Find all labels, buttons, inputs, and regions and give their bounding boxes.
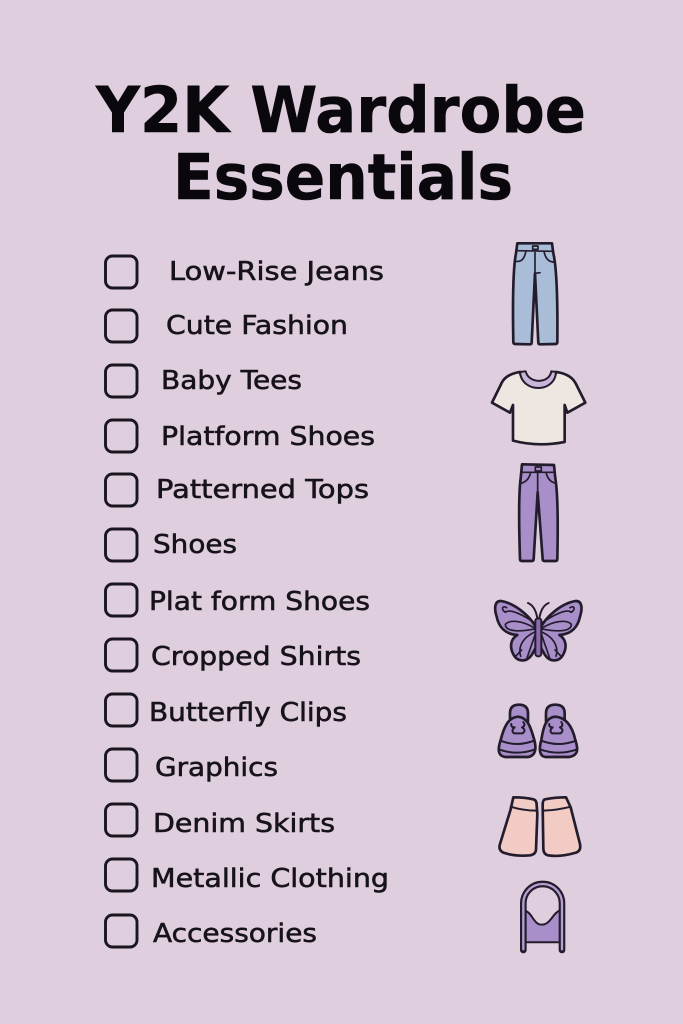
item: Metallic Clothing: Metallic Clothing (151, 864, 389, 894)
item: Plat form Shoes: Plat form Shoes (149, 587, 370, 617)
item: Cute Fashion (106, 310, 348, 342)
item: Patterned Tops (106, 474, 369, 506)
title: Y2K Wardrobe (95, 74, 586, 147)
item: Low-Rise Jeans (106, 256, 384, 288)
item: Low-Rise Jeans: Low-Rise Jeans (169, 257, 384, 287)
icon: platform shoes (499, 705, 577, 757)
icon: blue jeans (513, 243, 557, 344)
item: Platform Shoes (106, 420, 375, 452)
title: Essentials (173, 141, 513, 214)
icon: cream t-shirt (492, 371, 585, 444)
item: Shoes: Shoes (153, 530, 237, 560)
item: Metallic Clothing (106, 859, 389, 894)
item: Cropped Shirts: Cropped Shirts (151, 642, 361, 672)
item: Graphics: Graphics (155, 753, 278, 783)
item: Shoes (106, 529, 237, 561)
item: Platform Shoes: Platform Shoes (161, 422, 375, 452)
item: Denim Skirts: Denim Skirts (153, 809, 335, 839)
item: Cropped Shirts (106, 639, 361, 672)
item: Butterfly Clips: Butterfly Clips (149, 698, 347, 728)
icon: butterfly (495, 601, 581, 660)
item: Butterfly Clips (106, 694, 347, 728)
item: Cute Fashion: Cute Fashion (166, 311, 348, 341)
icon: purple jeans (519, 464, 558, 561)
title (95, 74, 586, 214)
item: Patterned Tops: Patterned Tops (156, 475, 369, 505)
item: Accessories (106, 915, 317, 949)
item: Accessories: Accessories (153, 919, 317, 949)
item: Denim Skirts (106, 804, 335, 839)
checklist (106, 256, 389, 949)
icon: denim skirts (499, 797, 580, 856)
item: Graphics (106, 749, 278, 783)
item: Baby Tees (106, 365, 302, 397)
item: Plat form Shoes (106, 584, 370, 617)
item: Baby Tees: Baby Tees (161, 366, 302, 396)
icon: accessory arch (523, 884, 562, 950)
